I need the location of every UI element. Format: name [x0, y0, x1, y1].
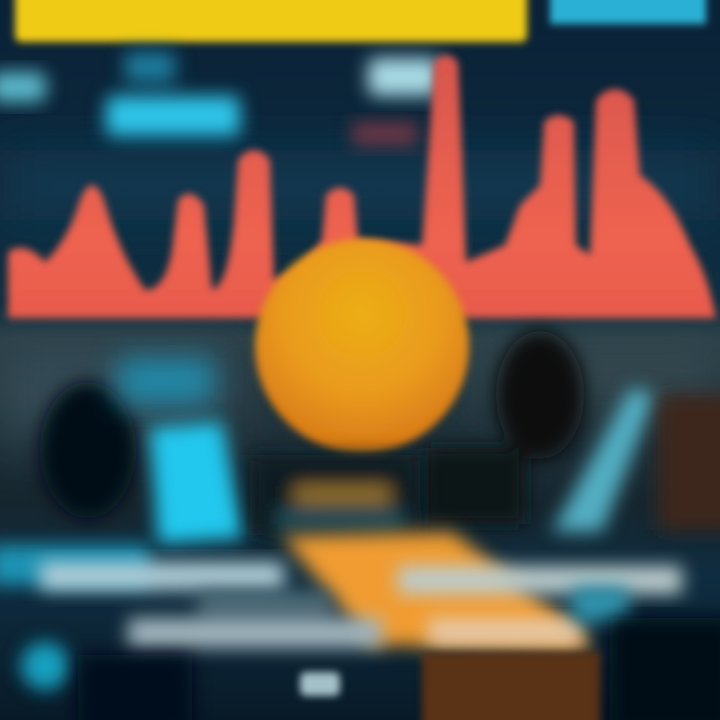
caption: first line	[40, 562, 682, 594]
cyan diagonal beam	[552, 388, 656, 532]
dark lower panels	[78, 618, 720, 720]
label: upper centre cyan text	[106, 52, 240, 136]
caption: third line	[300, 672, 340, 696]
orange sphere	[255, 239, 469, 453]
silhouette: left dark figure	[40, 382, 136, 518]
pedestal label under sphere	[250, 455, 420, 535]
cyan bottom strip	[0, 545, 150, 585]
label: upper right pale text	[368, 58, 440, 96]
subtitle banner	[550, 0, 706, 24]
caption: second line	[128, 592, 582, 648]
brown block bottom	[422, 652, 600, 720]
label: faint red text	[352, 122, 418, 146]
title banner	[15, 0, 527, 42]
cyan round icon	[21, 642, 69, 690]
label: upper left cyan text	[0, 72, 46, 102]
cyan accent right	[572, 586, 628, 622]
red area chart	[8, 55, 716, 318]
brown block right	[658, 395, 720, 530]
cyan glow behind left figure	[118, 358, 214, 404]
cyan panel	[150, 422, 244, 544]
silhouette: right dark figure	[425, 331, 584, 524]
orange panel	[282, 532, 594, 650]
band: teal glow	[0, 150, 720, 440]
